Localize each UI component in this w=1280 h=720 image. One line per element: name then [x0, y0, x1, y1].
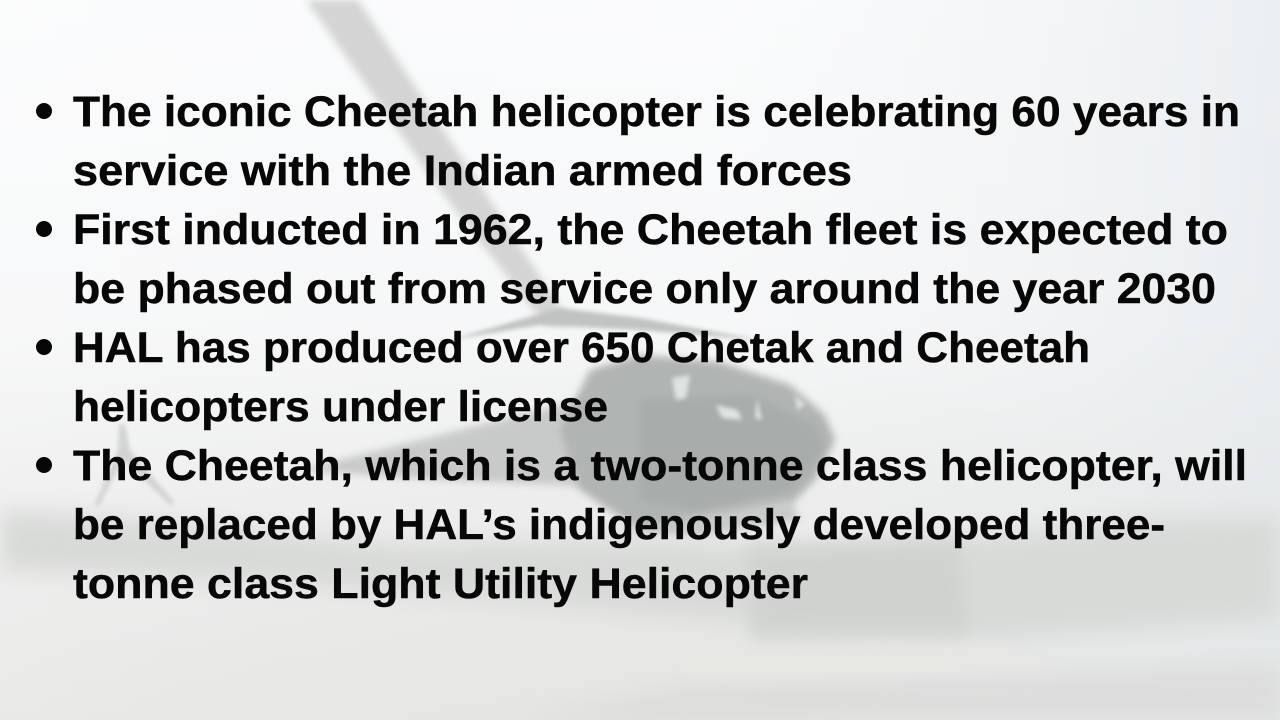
bullet list [36, 88, 1247, 608]
skid [620, 500, 800, 535]
bullet marker 1 [36, 103, 52, 119]
text lines 2: be phased out from service only around the year 2030 [73, 265, 1216, 313]
text lines 3: HAL has produced over 650 Chetak and Cheetah [73, 324, 1090, 372]
rotor hub [450, 308, 760, 340]
text lines 3 [73, 324, 1090, 431]
bullet marker 3 [36, 339, 52, 355]
rotor blade [306, 0, 572, 325]
ground [520, 665, 1280, 720]
text lines 1: service with the Indian armed forces [73, 147, 852, 195]
bullet 3: production [36, 324, 1090, 431]
bullet 4: replacement [36, 442, 1247, 608]
text lines 3: helicopters under license [73, 383, 608, 431]
cockpit highlights [672, 375, 805, 420]
bullet marker 2 [36, 221, 52, 237]
text lines 4 [73, 442, 1247, 608]
text lines 2 [73, 206, 1228, 313]
people under helicopter [745, 540, 970, 640]
tree line and field [0, 510, 1280, 640]
bullet 1: 60 years in service [36, 88, 1240, 195]
helicopter body [560, 355, 835, 530]
text lines 4: be replaced by HAL’s indigenously developed three- [73, 501, 1165, 549]
text lines 2: First inducted in 1962, the Cheetah fleet is expected to [73, 206, 1228, 254]
text lines 1: The iconic Cheetah helicopter is celebrating 60 years in [73, 88, 1240, 136]
text lines 4: tonne class Light Utility Helicopter [73, 560, 808, 608]
bullet marker 4 [36, 457, 52, 473]
bullet 2: phase-out [36, 206, 1228, 313]
text lines 1 [73, 88, 1240, 195]
tail rotor [94, 424, 175, 506]
helicopter tail boom [300, 385, 650, 490]
text lines 4: The Cheetah, which is a two-tonne class helicopter, will [73, 442, 1247, 490]
